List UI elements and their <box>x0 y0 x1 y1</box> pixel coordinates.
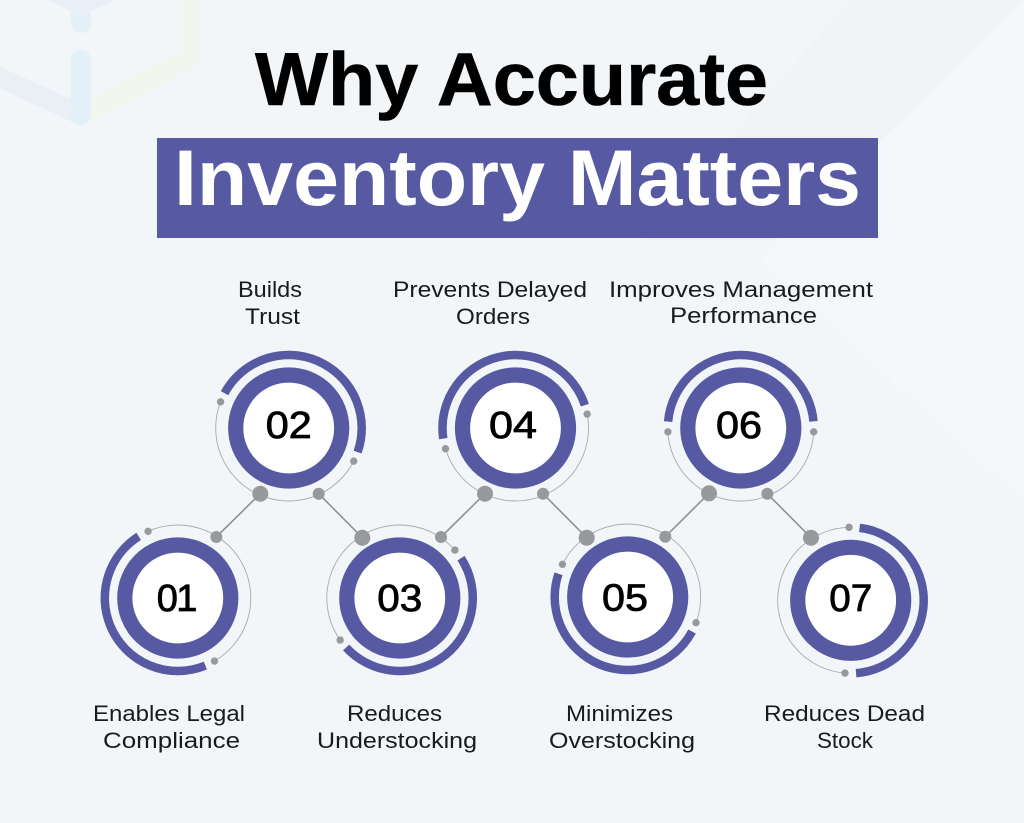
label: reduces dead stock: Reduces Dead <box>764 701 925 726</box>
step 07 circle: 07 <box>829 578 872 620</box>
label: enables legal compliance: Enables Legal <box>93 701 245 726</box>
background icon: faint cube <box>0 0 190 115</box>
label: enables legal compliance <box>93 701 245 753</box>
label: improves management performance <box>609 277 874 328</box>
step 05 circle <box>529 498 727 696</box>
label: reduces dead stock <box>764 701 925 753</box>
label: minimizes overstocking: Minimizes <box>566 701 673 726</box>
label: reduces understocking <box>317 701 477 753</box>
label: reduces dead stock: Stock <box>817 728 874 753</box>
label: builds trust: Builds <box>238 277 302 302</box>
step 02 circle: 02 <box>266 405 312 447</box>
connector lines between circles <box>216 493 811 538</box>
step 07 circle <box>769 519 932 682</box>
label: prevents delayed orders <box>393 277 587 329</box>
label: enables legal compliance: Compliance <box>103 728 240 753</box>
label: minimizes overstocking <box>549 701 695 753</box>
label: prevents delayed orders: Prevents Delayed <box>393 277 587 302</box>
step 01 circle: 01 <box>157 578 197 620</box>
step 03 circle: 03 <box>377 578 422 620</box>
step 03 circle <box>298 496 502 700</box>
label: minimizes overstocking: Overstocking <box>549 728 695 753</box>
title line 1: Why Accurate <box>255 37 768 121</box>
connector nodes <box>210 485 819 546</box>
step 04 circle: 04 <box>489 405 537 447</box>
label: reduces understocking: Understocking <box>317 728 477 753</box>
label: reduces understocking: Reduces <box>347 701 442 726</box>
step 02 circle <box>190 329 388 527</box>
title banner: Inventory Matters <box>174 133 861 222</box>
label: prevents delayed orders: Orders <box>456 304 530 329</box>
step 06 circle <box>662 349 820 507</box>
label: builds trust <box>238 277 302 329</box>
label: builds trust: Trust <box>245 304 301 329</box>
step 01 circle <box>81 502 274 694</box>
label: improves management performance: Improves Management <box>609 277 874 302</box>
step 06 circle: 06 <box>716 405 762 447</box>
label: improves management performance: Performance <box>670 303 817 328</box>
step 05 circle: 05 <box>602 578 648 620</box>
step 04 circle <box>430 342 601 514</box>
